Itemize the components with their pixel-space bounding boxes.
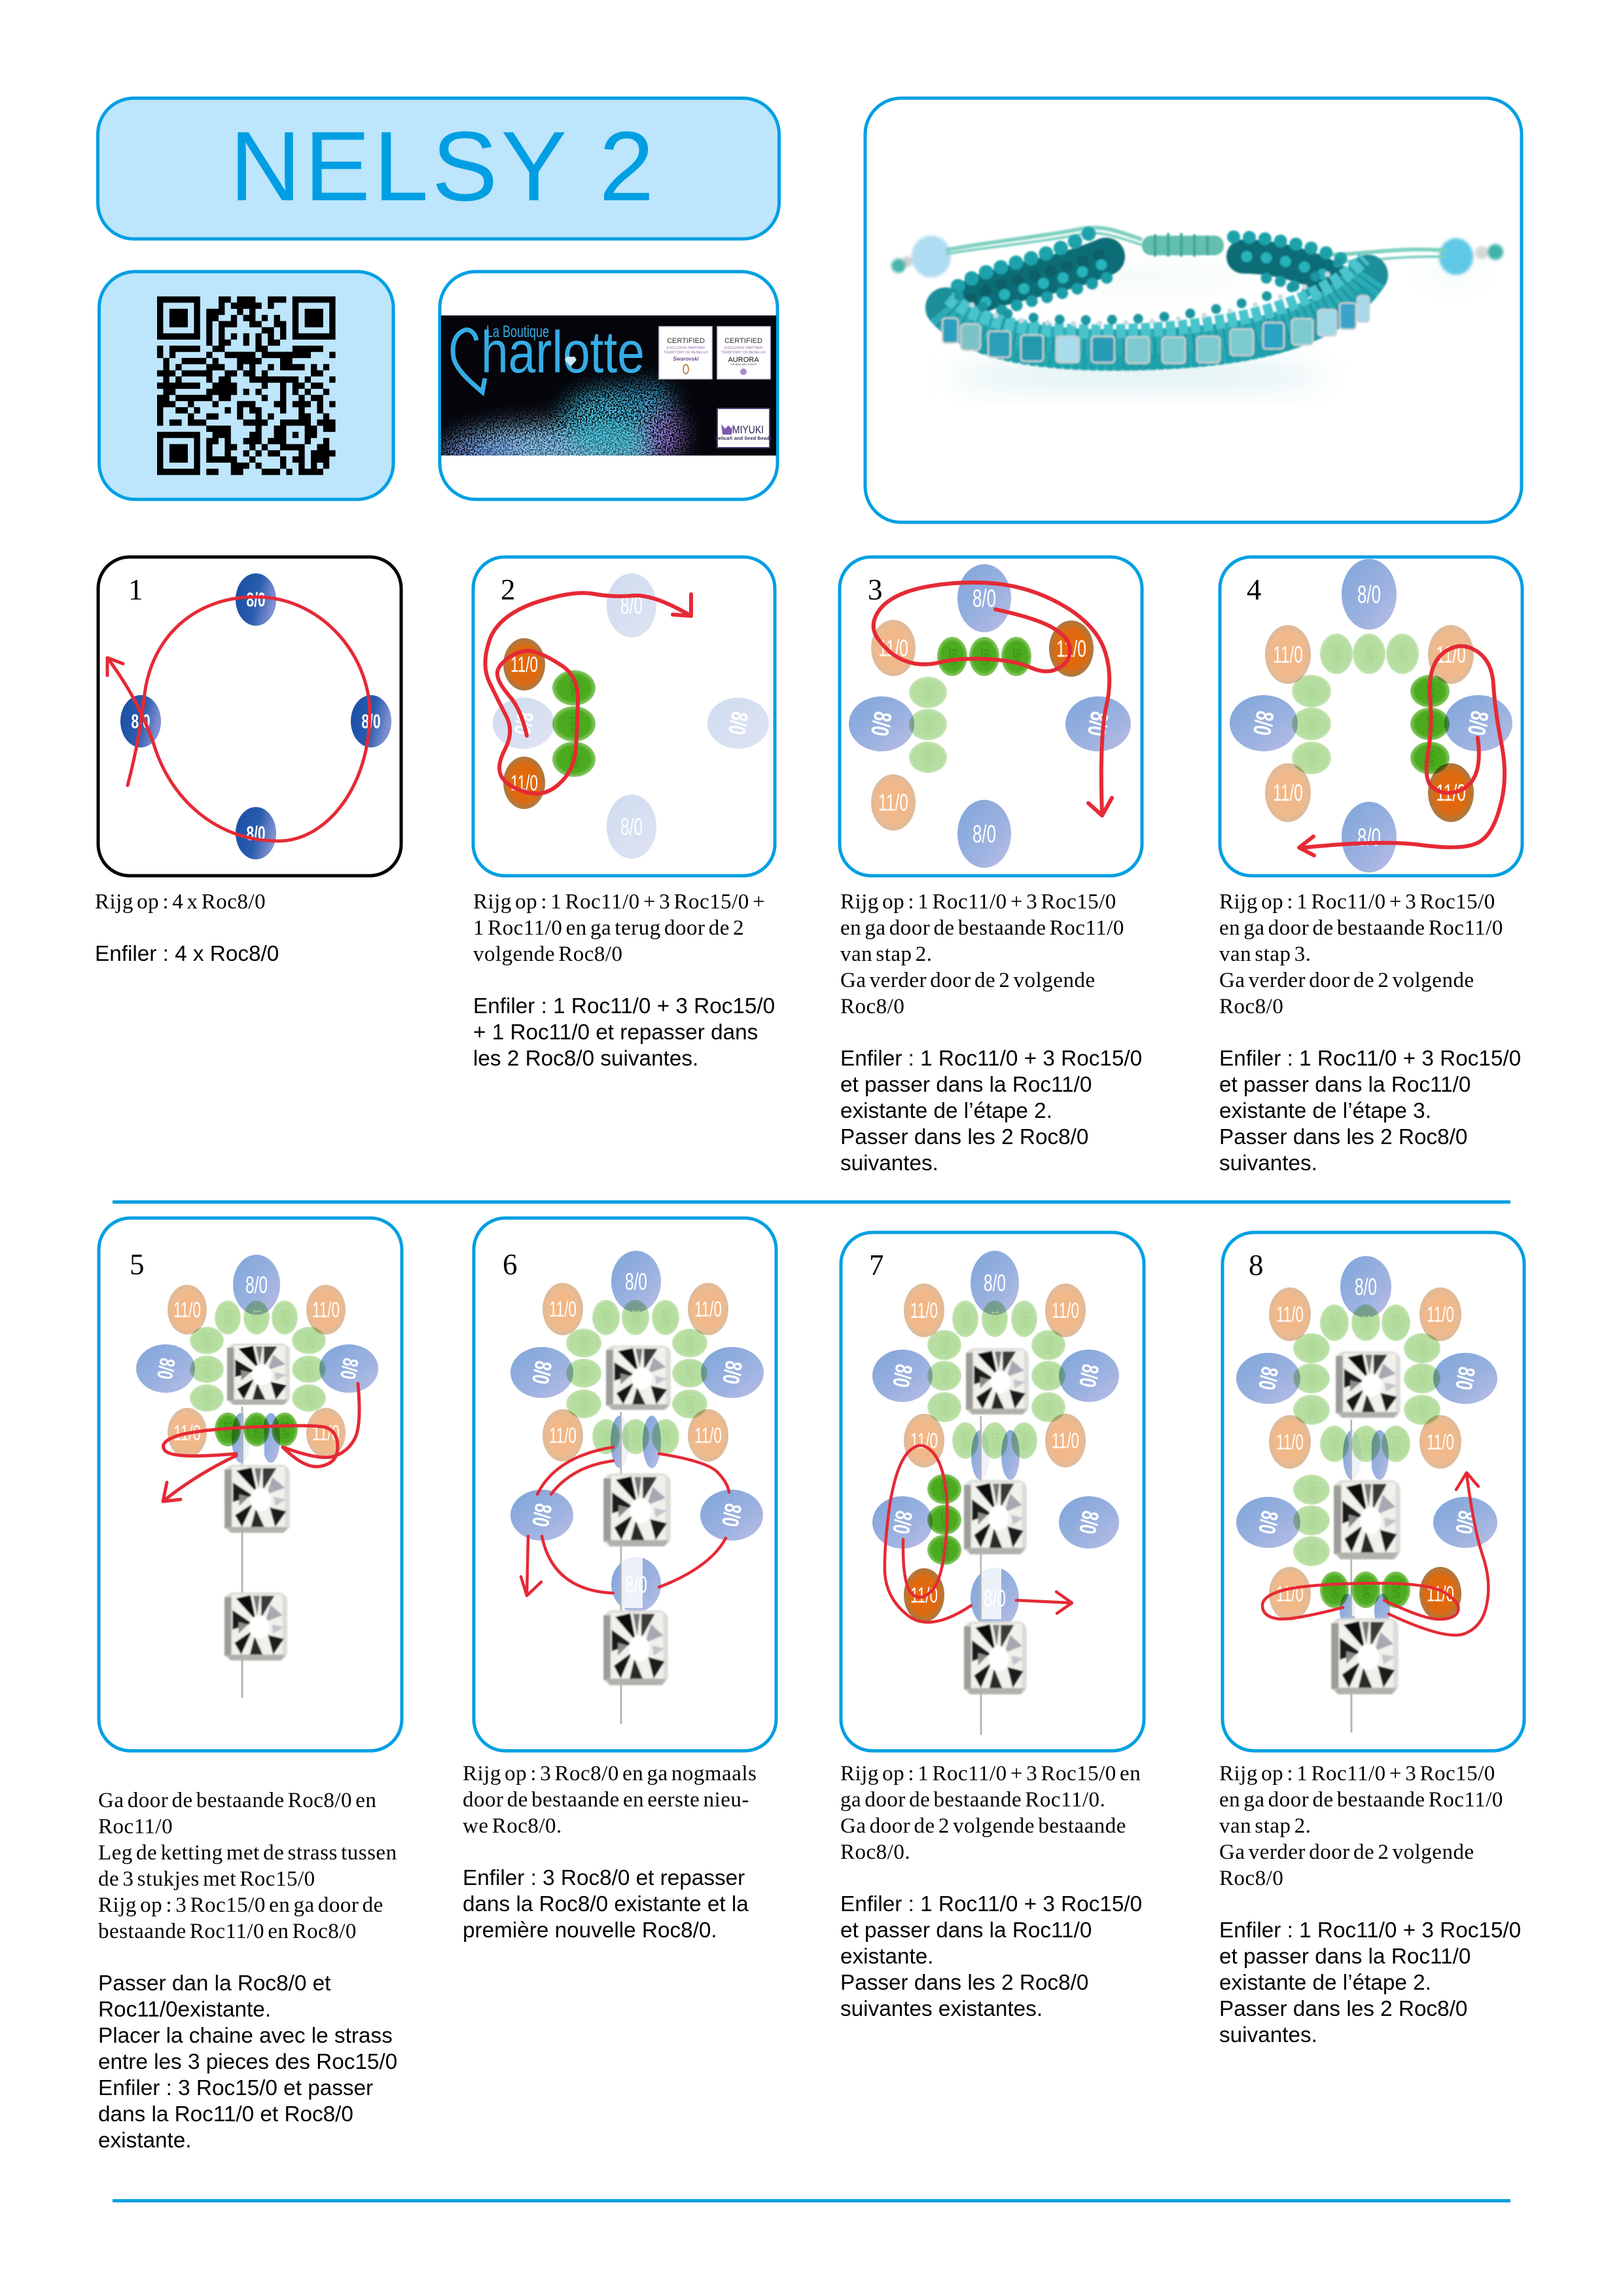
beads: 11/0 bbox=[312, 1297, 340, 1322]
instructions: step 6: we Roc8/0. bbox=[463, 1814, 562, 1838]
beads: 15/0 bbox=[684, 1395, 696, 1412]
thread path with arrow bbox=[885, 1446, 1072, 1623]
beads: 15/0 bbox=[1306, 1481, 1317, 1498]
beads: 8/0 bbox=[1450, 1509, 1480, 1536]
certified badges: CERTIFIED bbox=[667, 337, 705, 345]
certified badges: TERRITORY OF BENELUX bbox=[721, 351, 766, 355]
beads: 15/0 bbox=[1043, 1399, 1054, 1416]
thread path with arrow bbox=[1262, 1473, 1488, 1635]
half beads under chain bbox=[971, 1430, 1020, 1629]
beads: 8/0 bbox=[1248, 709, 1279, 738]
beads: 11/0 bbox=[1276, 1302, 1304, 1327]
beads: 11/0 bbox=[173, 1297, 201, 1322]
beads: 11/0 bbox=[878, 635, 908, 661]
beads: 15/0 bbox=[1306, 1340, 1317, 1357]
cords bbox=[946, 228, 1446, 262]
instructions: step 4: Ga verder door de 2 volgende bbox=[1219, 969, 1474, 992]
instructions: step 8: Roc8/0 bbox=[1219, 1867, 1283, 1890]
beads bbox=[849, 564, 1131, 868]
beads: 15/0 bbox=[978, 648, 990, 665]
beads: 11/0 bbox=[1052, 1428, 1079, 1453]
instructions: step 7: ga door de bestaande Roc11/0. bbox=[840, 1788, 1105, 1812]
end beads and cords bbox=[891, 236, 1503, 278]
instructions: step 4: existante de l’étape 3. bbox=[1219, 1099, 1431, 1123]
beads: 15/0 bbox=[922, 716, 934, 733]
instructions: step 3 bbox=[840, 890, 1142, 1175]
beads: 8/0 bbox=[887, 1362, 918, 1390]
step number 7: 7 bbox=[869, 1249, 883, 1282]
step number 6: 6 bbox=[503, 1248, 517, 1281]
back of band bbox=[946, 233, 1374, 318]
beads: 8/0 bbox=[1253, 1365, 1283, 1392]
beads: 15/0 bbox=[1416, 1370, 1428, 1387]
instructions: step 5: de 3 stukjes met Roc15/0 bbox=[98, 1867, 315, 1891]
beads: 15/0 bbox=[1010, 648, 1022, 665]
beads: 15/0 bbox=[303, 1390, 315, 1407]
beads: 11/0 bbox=[910, 1298, 938, 1323]
beads: 11/0 bbox=[1276, 1429, 1304, 1454]
beads: 8/0 bbox=[1357, 823, 1381, 851]
beads: 15/0 bbox=[938, 1541, 950, 1558]
instructions: step 8: et passer dans la Roc11/0 bbox=[1219, 1945, 1471, 1969]
beads: 8/0 bbox=[620, 814, 643, 840]
instructions: step 3: existante de l’étape 2. bbox=[840, 1099, 1052, 1123]
beads: 8/0 bbox=[620, 592, 643, 619]
beads: 11/0 bbox=[1436, 780, 1466, 806]
beads: 15/0 bbox=[1390, 1314, 1402, 1331]
beads: 15/0 bbox=[938, 1480, 950, 1498]
beads: 11/0 bbox=[1427, 1429, 1454, 1454]
instructions: step 5: Placer la chaine avec le strass bbox=[98, 2024, 393, 2048]
panel: step 2 bbox=[473, 557, 775, 876]
beads: 15/0 bbox=[201, 1361, 213, 1378]
beads: 15/0 bbox=[303, 1332, 315, 1349]
instructions: step 4: en ga door de bestaande Roc11/0 bbox=[1219, 916, 1503, 940]
instructions: step 7 bbox=[840, 1762, 1142, 2021]
beads: 15/0 bbox=[201, 1332, 213, 1349]
beads: 11/0 bbox=[1427, 1302, 1454, 1327]
instructions: step 2: Rijg op : 1 Roc11/0 + 3 Roc15/0 + bbox=[473, 890, 765, 914]
beads: 15/0 bbox=[600, 1428, 612, 1445]
QR code bbox=[157, 300, 336, 472]
beads: 15/0 bbox=[568, 679, 580, 696]
instructions: step 5 bbox=[98, 1789, 397, 2153]
half beads under chain bbox=[611, 1416, 661, 1612]
beads: 15/0 bbox=[989, 1310, 1001, 1327]
instructions: step 5: Ga door de bestaande Roc8/0 en bbox=[98, 1789, 376, 1812]
beads: 4 x 8/0: 8/0 bbox=[246, 821, 266, 845]
beads: 11/0 bbox=[910, 1583, 938, 1607]
beads: 8/0 bbox=[527, 1501, 557, 1529]
beads: 8/0 bbox=[866, 709, 897, 738]
thread path with arrow bbox=[163, 1384, 359, 1501]
beads: 15/0 bbox=[303, 1361, 315, 1378]
instructions: step 1: Enfiler : 4 x Roc8/0 bbox=[95, 942, 279, 966]
beads: 15/0 bbox=[568, 751, 580, 768]
panel: step 8 bbox=[1222, 1232, 1524, 1751]
instructions: step 4 bbox=[1219, 890, 1521, 1175]
beads: 15/0 bbox=[1363, 645, 1375, 662]
instructions: step 4: Rijg op : 1 Roc11/0 + 3 Roc15/0 bbox=[1219, 890, 1495, 914]
beads: 8/0 bbox=[972, 584, 996, 612]
beads: 8/0 bbox=[717, 1501, 747, 1529]
title banner bbox=[98, 98, 779, 239]
bottom divider line bbox=[113, 2199, 1510, 2202]
beads: 15/0 bbox=[600, 1309, 612, 1326]
beads: 8/0 bbox=[1074, 1509, 1104, 1536]
rhinestone chain bbox=[603, 1346, 671, 1724]
certified badges: AURORA bbox=[728, 356, 759, 364]
beads: 15/0 bbox=[578, 1365, 590, 1382]
certified badges: CERTIFIED bbox=[724, 337, 762, 345]
beads: 15/0 bbox=[660, 1428, 671, 1445]
beads: 15/0 bbox=[1360, 1314, 1372, 1331]
instructions: step 7: et passer dans la Roc11/0 bbox=[840, 1918, 1092, 1943]
instructions: step 4: van stap 3. bbox=[1219, 942, 1311, 966]
beads: 15/0 bbox=[1306, 715, 1317, 732]
beads: 15/0 bbox=[222, 1309, 234, 1326]
instructions: step 5: bestaande Roc11/0 en Roc8/0 bbox=[98, 1920, 357, 1943]
beads: 8/0 bbox=[527, 1359, 557, 1386]
instructions: step 2: + 1 Roc11/0 et repasser dans bbox=[473, 1020, 758, 1045]
beads: 15/0 bbox=[201, 1390, 213, 1407]
step number 5: 5 bbox=[130, 1248, 144, 1281]
thread path with arrow bbox=[107, 597, 370, 841]
beads: 11/0 bbox=[1273, 780, 1303, 806]
beads: 15/0 bbox=[1018, 1432, 1030, 1449]
panel: QR code bbox=[99, 272, 393, 499]
instructions: step 7: Roc8/0. bbox=[840, 1840, 910, 1864]
beads: 11/0 bbox=[1427, 1581, 1454, 1606]
beads: 15/0 bbox=[630, 1428, 641, 1445]
instructions: step 4: Roc8/0 bbox=[1219, 995, 1283, 1018]
beads: 11/0 bbox=[694, 1423, 722, 1448]
step number 3: 3 bbox=[868, 573, 882, 606]
beads bbox=[1236, 1256, 1497, 1621]
instructions: step 7: Rijg op : 1 Roc11/0 + 3 Roc15/0 en bbox=[840, 1762, 1141, 1785]
panel: shop logo bbox=[435, 272, 777, 499]
beads: 15/0 bbox=[1397, 645, 1408, 662]
beads: 15/0 bbox=[1043, 1336, 1054, 1354]
half beads under chain: 8/0 bbox=[625, 1571, 647, 1598]
beads: 15/0 bbox=[1330, 645, 1342, 662]
certified badges: MIYUKI bbox=[732, 423, 764, 436]
beads: 8/0 bbox=[508, 709, 539, 737]
beads: 8/0 bbox=[887, 1509, 918, 1536]
instructions: step 3: Enfiler : 1 Roc11/0 + 3 Roc15/0 bbox=[840, 1047, 1142, 1071]
beads: 8/0 bbox=[245, 1272, 268, 1298]
beads: 8/0 bbox=[1074, 1362, 1104, 1390]
beads: 8/0 bbox=[335, 1356, 363, 1381]
certified badges: EXCLUSIVE PARTNER bbox=[724, 346, 762, 350]
beads: 15/0 bbox=[1390, 1435, 1402, 1452]
step number 4: 4 bbox=[1247, 573, 1262, 606]
beads bbox=[872, 1251, 1119, 1622]
beads bbox=[510, 1251, 764, 1541]
beads: 8/0 bbox=[1463, 709, 1494, 738]
half beads under chain bbox=[1340, 1430, 1390, 1628]
panel: step 3 bbox=[840, 557, 1142, 876]
beads: 15/0 bbox=[989, 1432, 1001, 1449]
instructions: step 6 bbox=[463, 1762, 757, 1943]
instructions: step 7: Enfiler : 1 Roc11/0 + 3 Roc15/0 bbox=[840, 1892, 1142, 1916]
logo wordmark: La Boutique bbox=[486, 323, 549, 341]
certified badges: EXCLUSIVE PARTNER bbox=[667, 346, 705, 350]
beads: 8/0 bbox=[972, 820, 996, 848]
instructions: step 3: suivantes. bbox=[840, 1151, 938, 1175]
instructions: step 8: Enfiler : 1 Roc11/0 + 3 Roc15/0 bbox=[1219, 1918, 1521, 1943]
beads: 4 x 8/0: 8/0 bbox=[131, 709, 151, 733]
beads: 11/0 bbox=[1052, 1298, 1079, 1323]
thread path with arrow bbox=[1299, 646, 1505, 855]
instructions: step 8: Passer dans les 2 Roc8/0 bbox=[1219, 1997, 1467, 2021]
beads: 15/0 bbox=[1416, 1401, 1428, 1418]
panel: step 5 bbox=[99, 1218, 402, 1751]
beads: 15/0 bbox=[578, 1395, 590, 1412]
bracelet shadow bbox=[949, 264, 1486, 391]
beads: 15/0 bbox=[1329, 1435, 1340, 1452]
instructions: step 5: existante. bbox=[98, 2128, 192, 2153]
beads: 15/0 bbox=[1390, 1581, 1402, 1598]
beads: 11/0 bbox=[1436, 641, 1466, 668]
instructions: step 8: suivantes. bbox=[1219, 2023, 1317, 2047]
beads: 15/0 bbox=[1416, 1340, 1428, 1357]
beads: 15/0 bbox=[1306, 1543, 1317, 1560]
logo wordmark bbox=[453, 320, 645, 392]
panel: step 7 bbox=[841, 1232, 1144, 1751]
thread path with arrow bbox=[486, 593, 691, 794]
instructions: step 4: et passer dans la Roc11/0 bbox=[1219, 1073, 1471, 1097]
instructions: step 6: dans la Roc8/0 existante et la bbox=[463, 1892, 749, 1916]
instructions: step 8: Ga verder door de 2 volgende bbox=[1219, 1840, 1474, 1864]
instructions: step 6: première nouvelle Roc8/0. bbox=[463, 1918, 717, 1943]
beads: 8/0 bbox=[1082, 709, 1114, 738]
instructions: step 8: en ga door de bestaande Roc11/0 bbox=[1219, 1788, 1503, 1812]
beads bbox=[1230, 559, 1512, 872]
certified badges: THE BRILLIANT CHOICE bbox=[730, 363, 757, 366]
beads: 15/0 bbox=[1306, 1512, 1317, 1529]
beads: 15/0 bbox=[279, 1309, 291, 1326]
beads: 8/0 bbox=[723, 709, 753, 737]
beads: 15/0 bbox=[1043, 1367, 1054, 1384]
instructions: step 1: Rijg op : 4 x Roc8/0 bbox=[95, 890, 266, 914]
panel: step 4 bbox=[1220, 557, 1522, 876]
step number 1: 1 bbox=[128, 573, 143, 606]
glitter powder bbox=[435, 384, 684, 475]
instructions: step 6: Enfiler : 3 Roc8/0 et repasser bbox=[463, 1866, 745, 1890]
beads: 15/0 bbox=[938, 1336, 950, 1354]
step number 2: 2 bbox=[501, 573, 516, 606]
instructions: step 5: Enfiler : 3 Roc15/0 et passer bbox=[98, 2076, 373, 2100]
beads: 15/0 bbox=[959, 1310, 971, 1327]
instructions: step 2: volgende Roc8/0 bbox=[473, 942, 623, 966]
beads: 15/0 bbox=[1424, 683, 1436, 700]
thread path with arrow bbox=[874, 583, 1112, 816]
logo wordmark: harlotte bbox=[481, 320, 645, 386]
knot bbox=[1142, 233, 1224, 257]
beads: 8/0 bbox=[1450, 1365, 1480, 1392]
instructions: step 4: Passer dans les 2 Roc8/0 bbox=[1219, 1125, 1467, 1149]
divider line bbox=[113, 1200, 1510, 1204]
beads: 4 x 8/0: 8/0 bbox=[361, 709, 381, 733]
instructions: step 3: et passer dans la Roc11/0 bbox=[840, 1073, 1092, 1097]
beads bbox=[493, 573, 769, 859]
beads: 15/0 bbox=[959, 1432, 971, 1449]
instructions: step 3: Roc8/0 bbox=[840, 995, 904, 1018]
beads: 15/0 bbox=[938, 1511, 950, 1528]
instructions: step 3: Ga verder door de 2 volgende bbox=[840, 969, 1096, 992]
instructions: step 1 bbox=[95, 890, 279, 966]
panel: step 6 bbox=[474, 1218, 776, 1751]
instructions: step 5: dans la Roc11/0 et Roc8/0 bbox=[98, 2102, 353, 2126]
half beads under chain bbox=[232, 1413, 280, 1463]
instructions: step 7: Ga door de 2 volgende bestaande bbox=[840, 1814, 1126, 1838]
beads: 15/0 bbox=[1424, 715, 1436, 732]
rhinestone chain bbox=[224, 1344, 290, 1698]
instructions: step 2: 1 Roc11/0 en ga terug door de 2 bbox=[473, 916, 744, 940]
beads: 15/0 bbox=[630, 1309, 641, 1326]
instructions: step 8: van stap 2. bbox=[1219, 1814, 1311, 1838]
certified badges bbox=[659, 327, 772, 448]
beads: 11/0 bbox=[694, 1297, 722, 1321]
instructions: step 5: Roc11/0 bbox=[98, 1815, 173, 1839]
beads: 15/0 bbox=[922, 684, 934, 701]
certified badges: Swarovski bbox=[673, 356, 700, 362]
beads: 15/0 bbox=[1306, 683, 1317, 700]
rhinestone chain bbox=[964, 1348, 1029, 1735]
instructions: step 7: Passer dans les 2 Roc8/0 bbox=[840, 1971, 1088, 1995]
beads: 15/0 bbox=[1424, 749, 1436, 766]
logo banner bbox=[441, 315, 776, 456]
instructions: step 5: Leg de ketting met de strass tussen bbox=[98, 1841, 397, 1865]
soft glow under glitter bbox=[465, 418, 660, 456]
beads: 11/0 bbox=[1056, 636, 1086, 662]
half beads under chain: 8/0 bbox=[984, 1585, 1006, 1611]
beads: 15/0 bbox=[251, 1421, 262, 1438]
instructions: step 2 bbox=[473, 890, 775, 1071]
beads: 15/0 bbox=[1306, 1401, 1317, 1418]
beads: 15/0 bbox=[1329, 1581, 1340, 1598]
beads: 15/0 bbox=[684, 1365, 696, 1382]
beads: 8/0 bbox=[152, 1356, 179, 1381]
panel: finished bracelet photo bbox=[865, 98, 1522, 522]
beads: 15/0 bbox=[1306, 749, 1317, 766]
beads: 11/0 bbox=[549, 1423, 577, 1448]
beads: 15/0 bbox=[684, 1335, 696, 1352]
instructions: step 8 bbox=[1219, 1762, 1521, 2047]
title text: NELSY 2 bbox=[230, 111, 657, 221]
beads: 8/0 bbox=[1355, 1274, 1377, 1300]
instructions: step 6: Rijg op : 3 Roc8/0 en ga nogmaals bbox=[463, 1762, 757, 1785]
step number 8: 8 bbox=[1249, 1249, 1263, 1282]
beads: 11/0 bbox=[173, 1420, 201, 1445]
beads: 4 x 8/0: 8/0 bbox=[246, 588, 266, 611]
beads: 11/0 bbox=[878, 789, 908, 816]
beads: 11/0 bbox=[910, 1428, 938, 1453]
thread path with arrow bbox=[521, 1447, 729, 1596]
beads: 15/0 bbox=[922, 749, 934, 766]
bracelet bbox=[942, 228, 1446, 363]
rhinestone chain bbox=[1331, 1352, 1400, 1732]
beads: 11/0 bbox=[1273, 641, 1303, 668]
instructions: step 4: Enfiler : 1 Roc11/0 + 3 Roc15/0 bbox=[1219, 1047, 1521, 1071]
beads: 15/0 bbox=[1329, 1314, 1340, 1331]
beads: 15/0 bbox=[251, 1309, 262, 1326]
beads bbox=[136, 1255, 378, 1458]
instructions: step 3: en ga door de bestaande Roc11/0 bbox=[840, 916, 1124, 940]
beads: 15/0 bbox=[1360, 1581, 1372, 1598]
instructions: step 2: les 2 Roc8/0 suivantes. bbox=[473, 1047, 698, 1071]
instructions: step 3: van stap 2. bbox=[840, 942, 933, 966]
front of band bbox=[946, 255, 1369, 363]
beads: 15/0 bbox=[938, 1399, 950, 1416]
crystal stones bbox=[942, 296, 1369, 363]
instructions: step 5: Rijg op : 3 Roc15/0 en ga door de bbox=[98, 1893, 383, 1917]
instructions: step 5: Passer dan la Roc8/0 et bbox=[98, 1971, 330, 1996]
beads: 15/0 bbox=[568, 715, 580, 732]
beads: 11/0 bbox=[510, 652, 538, 677]
instructions: step 3: Rijg op : 1 Roc11/0 + 3 Roc15/0 bbox=[840, 890, 1116, 914]
certified badges: Delica® and Seed Beads bbox=[715, 435, 772, 441]
beads: 11/0 bbox=[1276, 1581, 1304, 1606]
instructions: step 5: entre les 3 pieces des Roc15/0 bbox=[98, 2050, 397, 2074]
beads: 15/0 bbox=[1306, 1370, 1317, 1387]
panel: step 1 bbox=[98, 557, 401, 876]
beads: 15/0 bbox=[938, 1367, 950, 1384]
beads: 15/0 bbox=[946, 648, 958, 665]
instructions: step 4: suivantes. bbox=[1219, 1151, 1317, 1175]
beads: 4 x 8/0 bbox=[120, 573, 391, 859]
beads: 15/0 bbox=[279, 1421, 291, 1438]
beads: 15/0 bbox=[1018, 1310, 1030, 1327]
instructions: step 7: suivantes existantes. bbox=[840, 1997, 1043, 2021]
instructions: step 8: Rijg op : 1 Roc11/0 + 3 Roc15/0 bbox=[1219, 1762, 1495, 1785]
instructions: step 3: Passer dans les 2 Roc8/0 bbox=[840, 1125, 1088, 1149]
beads: 11/0 bbox=[549, 1297, 577, 1321]
beads: 11/0 bbox=[312, 1420, 340, 1445]
instructions: step 2: Enfiler : 1 Roc11/0 + 3 Roc15/0 bbox=[473, 994, 775, 1018]
beads: 15/0 bbox=[660, 1309, 671, 1326]
beads: 8/0 bbox=[1357, 581, 1381, 608]
certified badges: TERRITORY OF BENELUX bbox=[664, 351, 708, 355]
instructions: step 5: Roc11/0existante. bbox=[98, 1998, 271, 2022]
beads: 8/0 bbox=[625, 1268, 647, 1295]
beads: 15/0 bbox=[222, 1421, 234, 1438]
instructions: step 8: existante de l’étape 2. bbox=[1219, 1971, 1431, 1995]
beads: 15/0 bbox=[578, 1335, 590, 1352]
beads: 11/0 bbox=[510, 770, 538, 795]
instructions: step 6: door de bestaande en eerste nieu- bbox=[463, 1788, 749, 1812]
beads: 8/0 bbox=[984, 1270, 1006, 1296]
beads: 15/0 bbox=[1360, 1435, 1372, 1452]
instructions: step 7: existante. bbox=[840, 1945, 934, 1969]
beads: 8/0 bbox=[1253, 1509, 1283, 1536]
beads: 8/0 bbox=[717, 1359, 747, 1386]
